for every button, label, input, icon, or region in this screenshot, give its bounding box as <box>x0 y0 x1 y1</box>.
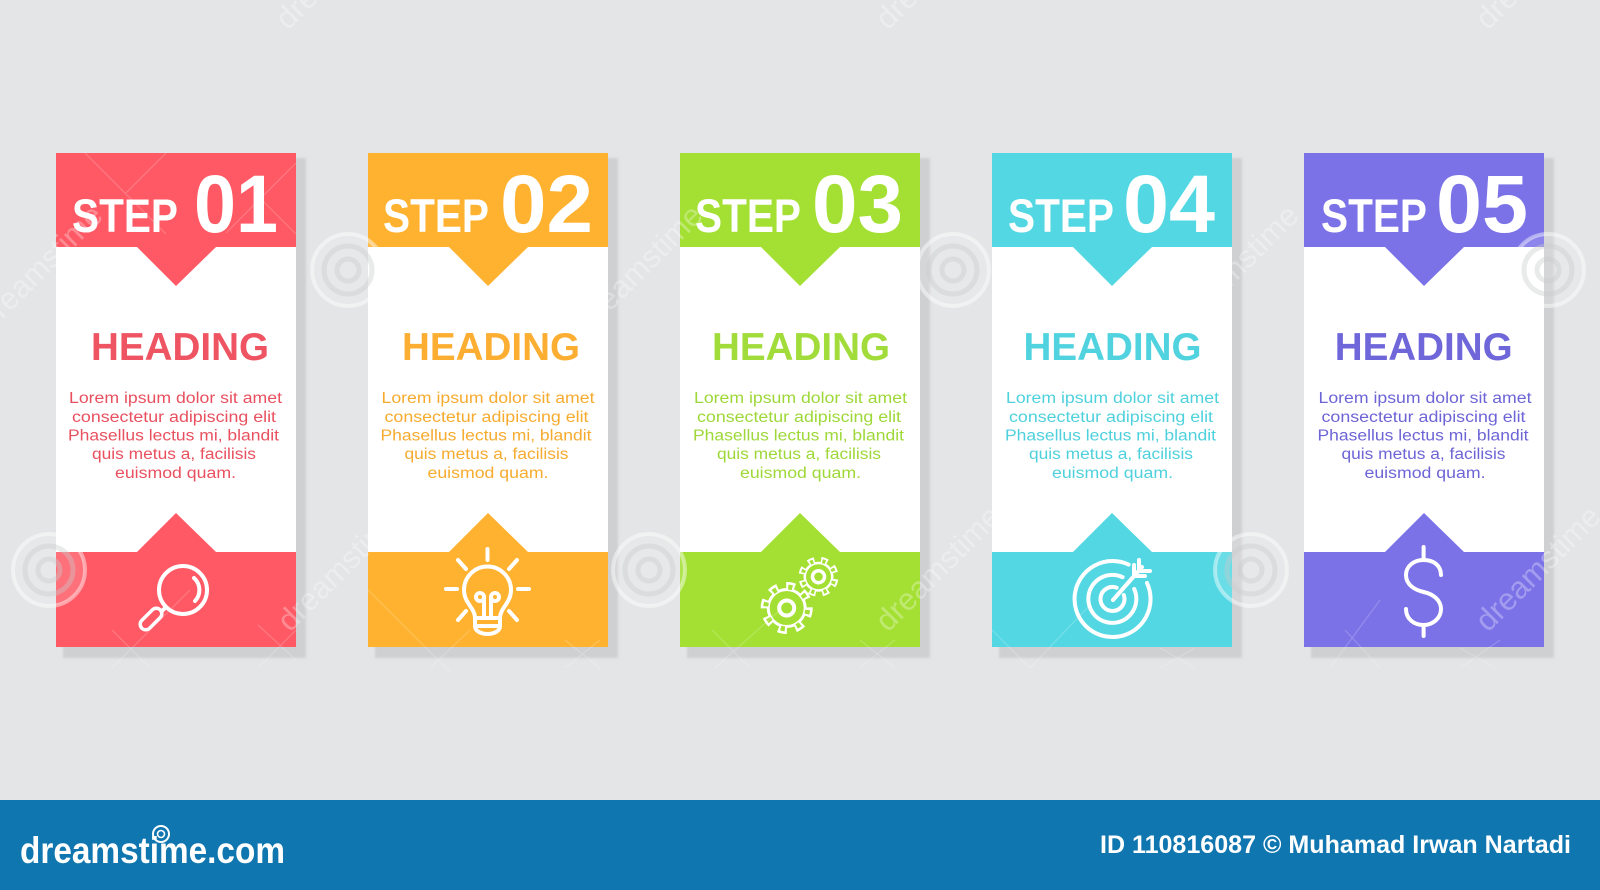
body text: euismod quam. <box>740 465 861 482</box>
icon: magnifying glass <box>138 566 207 632</box>
image credit: ID 110816087 © Muhamad Irwan Nartadi <box>1100 831 1571 859</box>
body text: consectetur adipiscing elit <box>1322 409 1526 426</box>
panel: step 02 <box>368 153 618 658</box>
card shadow <box>999 158 1242 658</box>
body text: consectetur adipiscing elit <box>384 409 589 426</box>
icon: light bulb <box>446 549 529 634</box>
body text: Lorem ipsum dolor sit amet <box>69 390 283 407</box>
body text: euismod quam. <box>115 465 236 482</box>
card shadow <box>375 158 618 658</box>
large gear <box>765 586 809 630</box>
body text: consectetur adipiscing elit <box>697 409 902 426</box>
step label: STEP <box>383 189 489 242</box>
header band with arrow <box>368 153 608 286</box>
body text <box>693 390 908 482</box>
heading: HEADING <box>1335 326 1513 369</box>
logo spiral <box>153 826 169 842</box>
panel: step 05 <box>1304 153 1554 658</box>
body text: Lorem ipsum dolor sit amet <box>1318 390 1532 407</box>
watermark text: dreamstime <box>570 198 709 337</box>
header band with arrow <box>992 153 1232 286</box>
card body <box>1304 153 1544 647</box>
logo wordmark: dreamstime.com <box>20 830 285 871</box>
footer band with arrow <box>992 513 1232 647</box>
card body <box>680 153 920 647</box>
body text <box>68 390 283 482</box>
body text: Lorem ipsum dolor sit amet <box>1006 390 1220 407</box>
step number: 04 <box>1123 159 1215 250</box>
card shadow <box>63 158 306 658</box>
watermark text: dreamstime <box>868 499 1007 638</box>
step label: STEP <box>1321 189 1427 242</box>
body text: quis metus a, facilisis <box>92 446 256 463</box>
watermark text <box>0 0 1600 638</box>
body text: consectetur adipiscing elit <box>1009 409 1214 426</box>
body text: quis metus a, facilisis <box>717 446 881 463</box>
body text <box>1318 390 1532 482</box>
body text: euismod quam. <box>1364 465 1486 482</box>
icon: dollar sign <box>1406 547 1441 636</box>
body text: Phasellus lectus mi, blandit <box>1005 428 1217 444</box>
heading: HEADING <box>91 326 269 369</box>
heading: HEADING <box>712 326 890 369</box>
footer banner <box>0 800 1600 890</box>
watermark spirals <box>13 234 1584 606</box>
body text: quis metus a, facilisis <box>1029 446 1193 463</box>
body text: Phasellus lectus mi, blandit <box>68 428 280 444</box>
body text: quis metus a, facilisis <box>404 446 569 463</box>
step number: 03 <box>812 159 903 250</box>
step number: 02 <box>500 159 593 250</box>
icon: target with arrow <box>1075 560 1151 637</box>
step number: 01 <box>194 159 278 250</box>
footer band with arrow <box>56 513 296 647</box>
body text: Lorem ipsum dolor sit amet <box>382 390 595 407</box>
watermark text: dreamstime <box>1166 198 1305 337</box>
body text: Lorem ipsum dolor sit amet <box>694 390 908 407</box>
footer band with arrow <box>680 513 920 647</box>
card body <box>368 153 608 647</box>
body text: Phasellus lectus mi, blandit <box>380 428 592 444</box>
header band with arrow <box>680 153 920 286</box>
watermark text: dreamstime <box>270 499 409 638</box>
body text: euismod quam. <box>428 465 548 482</box>
step label: STEP <box>72 189 178 242</box>
header band with arrow <box>1304 153 1544 286</box>
card body <box>992 153 1232 647</box>
heading: HEADING <box>1024 326 1202 369</box>
step number: 05 <box>1436 159 1528 250</box>
step label: STEP <box>1008 189 1114 242</box>
body text <box>380 390 595 482</box>
panel: step 04 <box>992 153 1242 658</box>
header band with arrow <box>56 153 296 286</box>
card body <box>56 153 296 647</box>
body text <box>1005 390 1220 482</box>
step label: STEP <box>695 189 801 242</box>
body text: Phasellus lectus mi, blandit <box>1318 428 1529 444</box>
body text: euismod quam. <box>1052 465 1173 482</box>
small gear <box>799 557 838 596</box>
card shadow <box>1311 158 1554 658</box>
icon: gears <box>765 557 838 630</box>
watermark overlay <box>0 0 1600 672</box>
watermark crossing lines <box>85 153 1500 672</box>
panel: step 03 <box>680 153 930 658</box>
body text: Phasellus lectus mi, blandit <box>693 428 905 444</box>
footer band with arrow <box>368 513 608 647</box>
panel: step 01 <box>56 153 306 658</box>
body text: consectetur adipiscing elit <box>72 409 277 426</box>
heading: HEADING <box>402 326 580 369</box>
card shadow <box>687 158 930 658</box>
banner background <box>0 800 1600 890</box>
footer band with arrow <box>1304 513 1544 647</box>
body text: quis metus a, facilisis <box>1342 446 1506 463</box>
